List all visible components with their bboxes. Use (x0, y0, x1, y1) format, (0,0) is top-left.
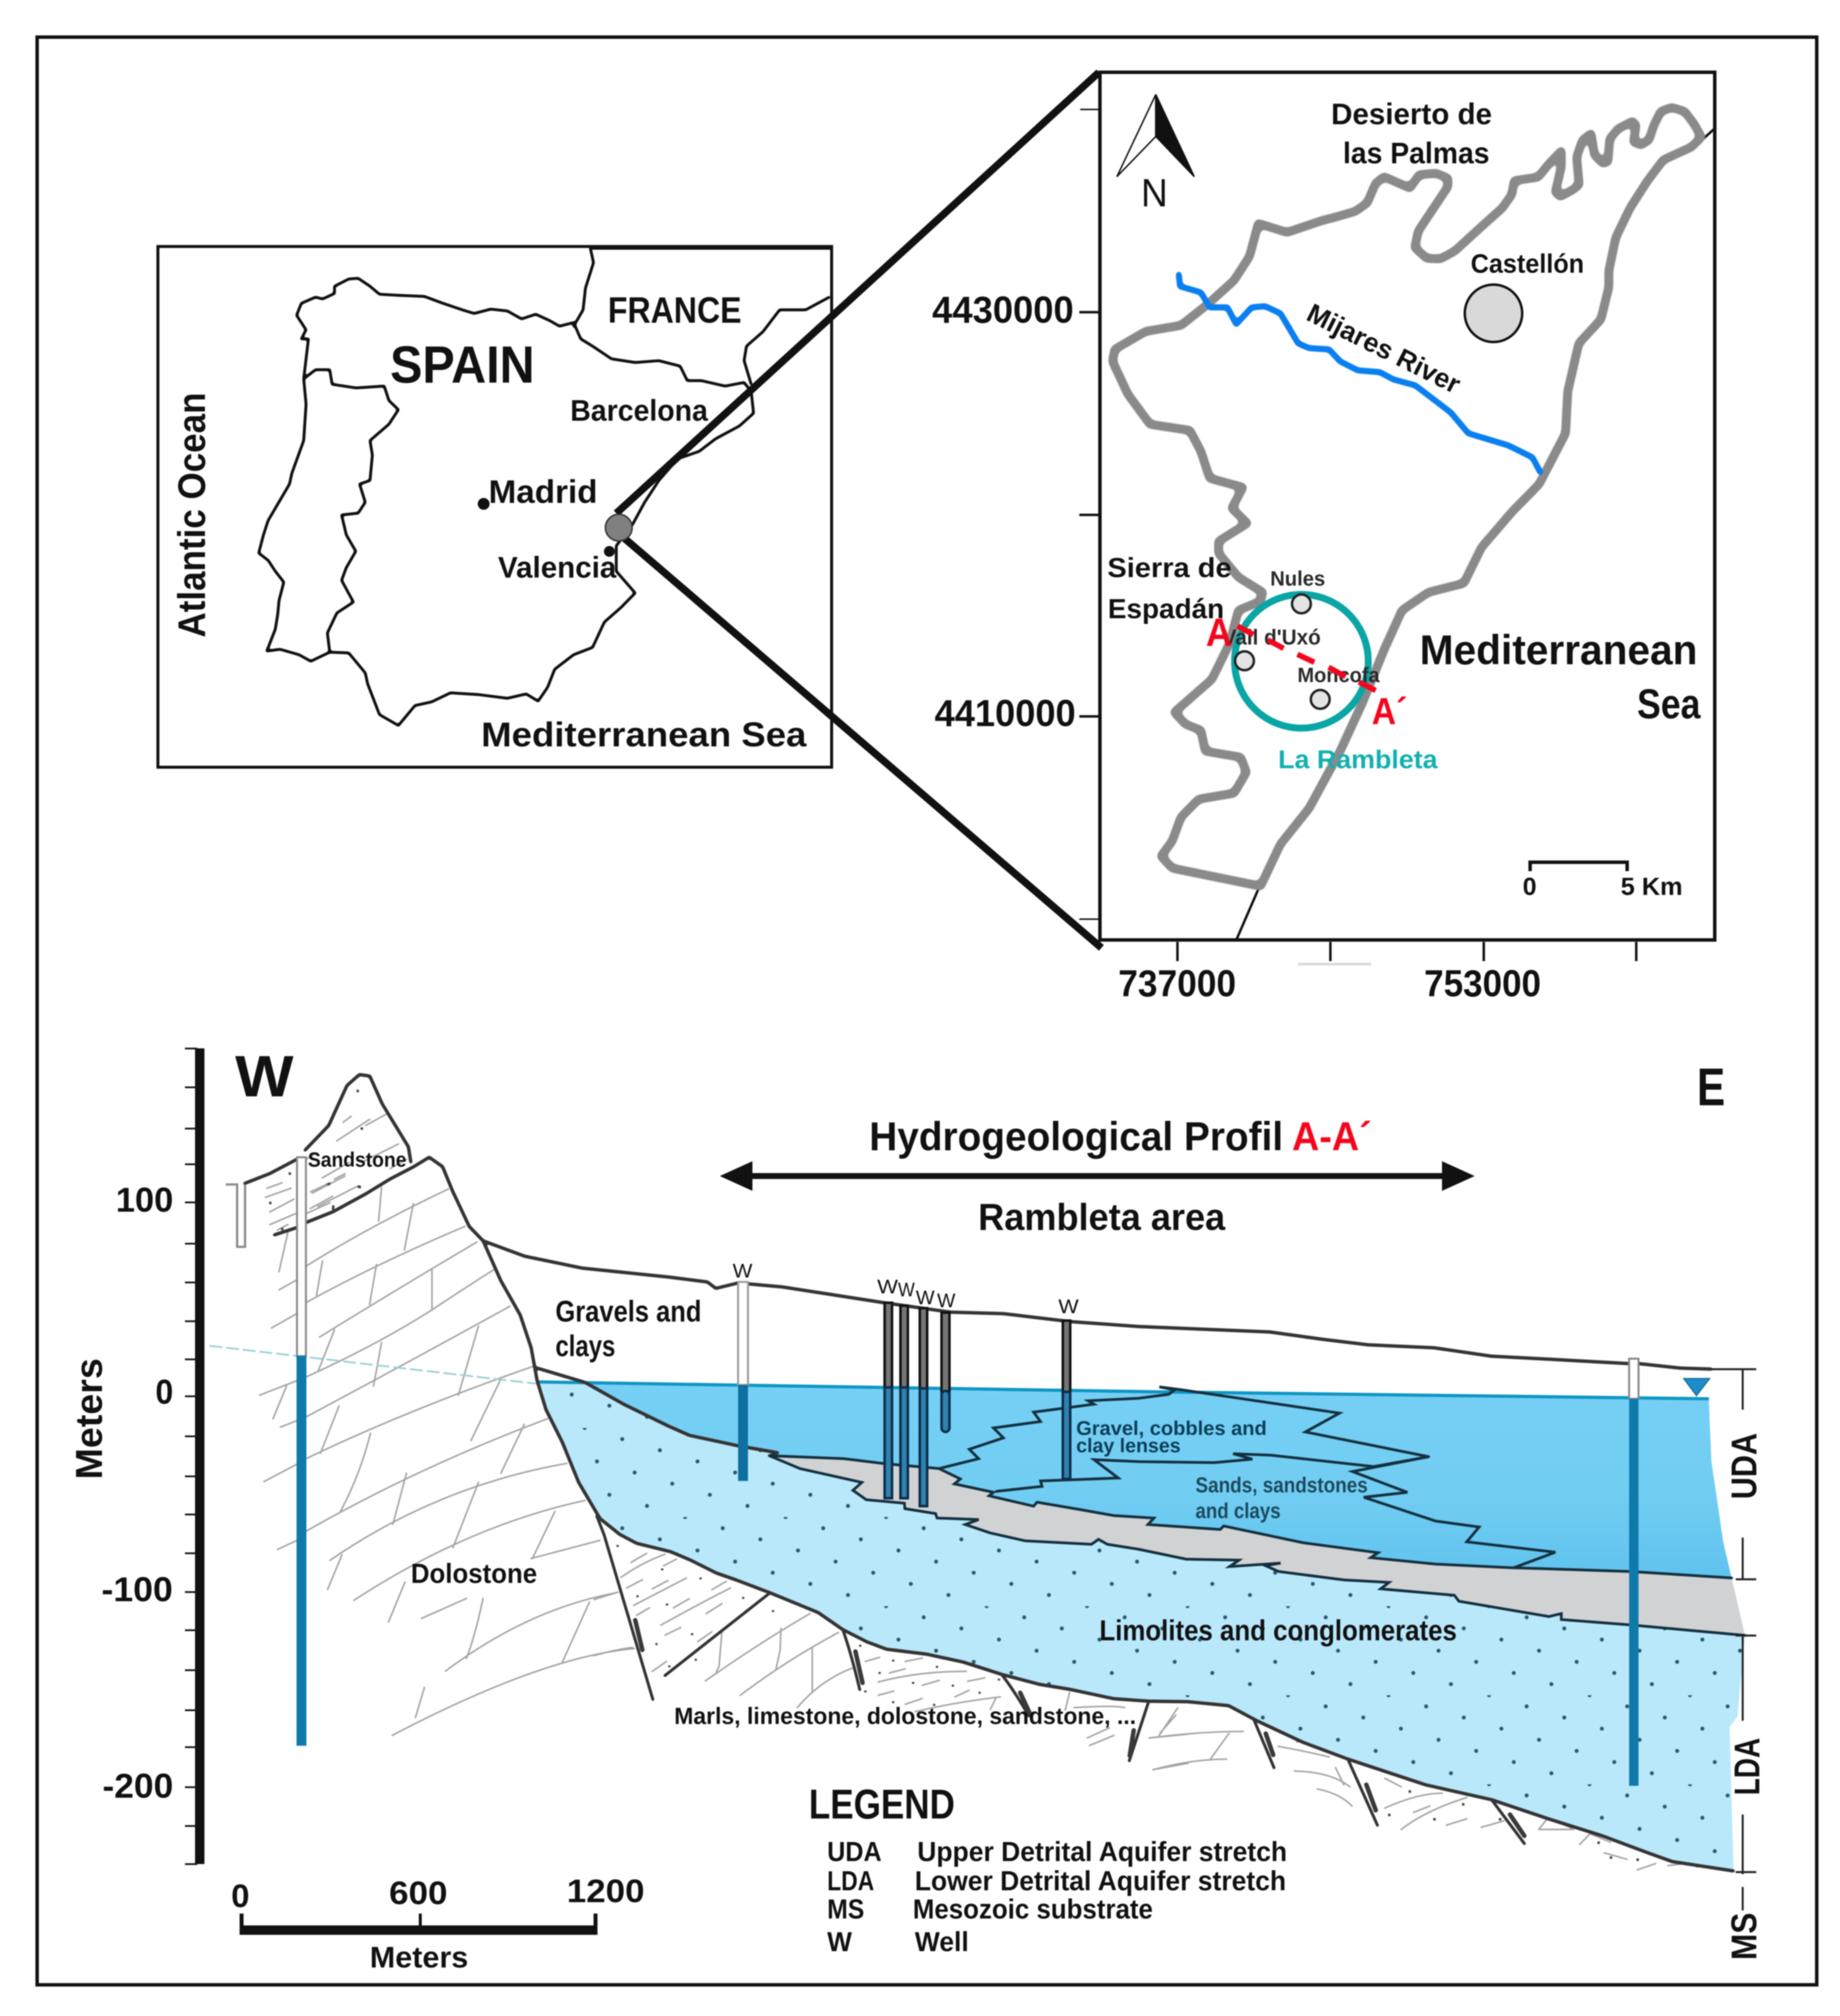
label: SPAIN: SPAIN (390, 336, 535, 394)
well, far left shallow (226, 1184, 245, 1247)
vertical axis in meters (101, 1048, 204, 1864)
La Rambleta circle (1235, 594, 1368, 728)
town labels: Moncofa (1297, 663, 1380, 687)
axis values (101, 1180, 173, 1805)
lithology labels: and clays (1195, 1499, 1281, 1523)
lithology labels: clay lenses (1076, 1435, 1181, 1457)
Castellón city symbol and label (1465, 249, 1584, 342)
unit labels: UDA, LDA, MS (1725, 1433, 1767, 1960)
lithology labels: Dolostone (411, 1558, 537, 1589)
label: W, west: W (235, 1044, 294, 1109)
label: Desierto de las Palmas: las Palmas (1343, 137, 1490, 170)
horizontal scale bar: 1200 (567, 1872, 645, 1909)
label: A: A (1206, 610, 1232, 654)
label: Atlantic Ocean: Atlantic Ocean (170, 393, 213, 638)
town labels (1223, 567, 1380, 687)
north arrow (1117, 95, 1194, 177)
inset map coordinate labels: 753000 (1424, 963, 1541, 1005)
inset map coordinate labels (932, 289, 1541, 1005)
well: mountain deep borehole (297, 1157, 306, 1746)
study area location dot (605, 514, 632, 541)
axis values: 0 (155, 1373, 173, 1411)
label: Valencia with city dot: Valencia (498, 551, 617, 584)
map outline: Spain and Portugal coast and borders (259, 247, 829, 726)
legend: MS (827, 1893, 864, 1924)
well labels W: W (898, 1279, 915, 1301)
normal faults, right (1253, 1719, 1524, 1844)
legend: Lower Detrital Aquifer stretch (915, 1865, 1286, 1896)
normal faults, right of centre (1129, 1703, 1148, 1761)
unit labels: UDA, LDA, MS: UDA (1725, 1433, 1764, 1499)
label: Rambleta area: Rambleta area (978, 1196, 1226, 1238)
well: W6 (1063, 1321, 1070, 1479)
unit labels: UDA, LDA, MS: MS (1725, 1913, 1764, 1960)
legend: LEGEND (809, 1781, 955, 1827)
lithology labels: Sandstone (308, 1148, 406, 1171)
axis values: -200 (102, 1767, 173, 1805)
lithology labels: Limolites and conglomerates (1099, 1615, 1457, 1647)
horizontal scale bar (231, 1872, 645, 1974)
label: Mediterranean Sea on inset (1420, 627, 1701, 727)
unit labels: UDA, LDA, MS: LDA (1728, 1738, 1767, 1795)
lithology labels (308, 1148, 1457, 1729)
label: A´: A´ (1372, 690, 1407, 733)
lithology labels: Marls, limestone, dolostone, sandstone, ... (674, 1703, 1136, 1729)
legend: Upper Detrital Aquifer stretch (917, 1836, 1287, 1867)
upper aquifer layer (592, 1384, 1732, 1578)
lithology labels: clays (555, 1329, 615, 1363)
sandstone hill hatch (306, 1090, 406, 1210)
label: La Rambleta: La Rambleta (1278, 745, 1438, 774)
Mesozoic substrate hatch, centre (1065, 1692, 1188, 1770)
label: Mijares River: Mijares River (1302, 298, 1465, 399)
inset scale bar: 0 (1523, 873, 1537, 900)
legend: Well (915, 1926, 969, 1957)
label: E, east: E (1697, 1057, 1725, 1117)
label: FRANCE: FRANCE (608, 290, 742, 331)
Mijares River line (1179, 274, 1541, 472)
panel: regional inset map (1079, 72, 1716, 964)
well labels W: W (1058, 1296, 1079, 1318)
well labels W: W (733, 1260, 752, 1282)
water table triangle symbol (1684, 1378, 1710, 1396)
legend: LDA (827, 1865, 874, 1896)
dolostone bedding hatch (259, 1172, 635, 1735)
label: N: N (1141, 171, 1168, 215)
geological contact lines (245, 1075, 1745, 1871)
inset map coordinate labels: 737000 (1118, 963, 1236, 1005)
water table line and dashed extension (209, 1346, 1709, 1399)
panel: Iberian Peninsula location map (158, 246, 832, 767)
well: right deep borehole (1629, 1359, 1639, 1786)
axis ticks (185, 1048, 197, 1864)
thick top edge of map frame (590, 246, 832, 249)
legend: Mesozoic substrate (913, 1893, 1153, 1924)
title: Hydrogeological Profil A-A´: A-A´ (1292, 1114, 1372, 1159)
Castellón city symbol and label: Castellón (1471, 249, 1584, 279)
inset scale bar (1523, 862, 1683, 900)
wells: W2, W3, W4, W5 (885, 1303, 949, 1506)
label: Sierra de Espadán: Espadán (1108, 593, 1224, 624)
axis values: 100 (116, 1180, 173, 1219)
well labels W: W (937, 1290, 955, 1312)
red profile line A-A´ (1238, 626, 1376, 690)
lithology labels: Gravel, cobbles and (1076, 1418, 1267, 1439)
label: Sierra de Espadán (1107, 552, 1232, 624)
panel: hydrogeological cross-section (68, 1044, 1767, 1974)
right bracket: aquifer units (1711, 1369, 1756, 1911)
Mesozoic substrate hatch, right (1151, 1708, 1701, 1870)
well labels W: W (916, 1287, 935, 1309)
double-headed arrow (720, 1161, 1475, 1191)
label: Mediterranean Sea on inset: Sea (1637, 681, 1701, 727)
lithology labels: Gravels and (555, 1295, 701, 1328)
inset map coordinate labels: 4410000 (935, 692, 1076, 735)
legend (809, 1781, 1287, 1957)
label: Mediterranean Sea on inset: Mediterranean (1420, 627, 1697, 673)
label: Mediterranean Sea: Mediterranean Sea (481, 715, 807, 754)
gray aquitard layer (769, 1456, 1745, 1635)
label: Madrid with city dot: Madrid (489, 473, 597, 510)
label: Desierto de las Palmas: Desierto de (1331, 98, 1492, 131)
connector lines from location dot to inset map (616, 72, 1101, 948)
lower aquifer layer: limolites and conglomerates (537, 1382, 1745, 1871)
lithology labels: Sands, sandstones (1195, 1473, 1368, 1497)
horizontal scale bar: 600 (389, 1874, 448, 1911)
ground surface, mountain and basement contacts (245, 1075, 1734, 1871)
aquitard and lens contacts (769, 1387, 1745, 1635)
well: W1 (738, 1282, 748, 1481)
inset map frame ticks (1079, 109, 1716, 964)
well labels W: W (877, 1276, 898, 1298)
axis title: Meters: Meters (68, 1358, 110, 1479)
well labels W (733, 1260, 1079, 1318)
town labels: Vall d'Uxó (1223, 625, 1321, 649)
label: Barcelona: Barcelona (570, 394, 708, 427)
inset scale bar: 5 Km (1621, 873, 1683, 900)
title: Hydrogeological Profil A-A´: Hydrogeological Profil (869, 1114, 1283, 1159)
inset map coordinate labels: 4430000 (932, 289, 1074, 331)
horizontal scale bar: Meters (370, 1941, 468, 1974)
label: Desierto de las Palmas (1331, 98, 1492, 170)
town symbols: Nules, Vall d'Uxó, Moncofa (1235, 594, 1330, 709)
town labels: Nules (1270, 567, 1325, 590)
Mesozoic substrate hatch, left centre (594, 1545, 1000, 1712)
axis values: -100 (101, 1570, 173, 1609)
legend: UDA (827, 1836, 882, 1867)
legend: W (827, 1926, 852, 1957)
regional boundary outline (1112, 107, 1701, 886)
horizontal scale bar: 0 (231, 1877, 249, 1914)
label: Sierra de Espadán: Sierra de (1107, 552, 1232, 583)
normal faults, left and centre (597, 1516, 1030, 1716)
